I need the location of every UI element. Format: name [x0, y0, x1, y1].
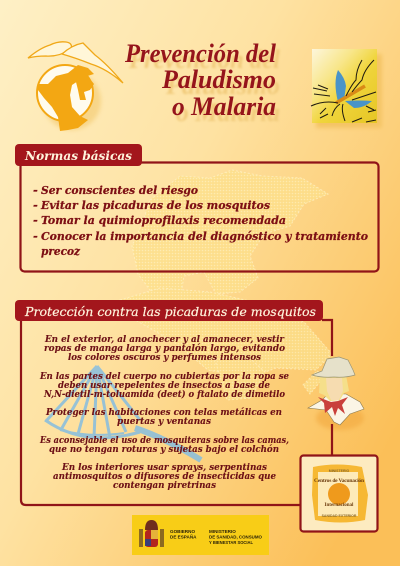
icon: traveller with hat — [308, 357, 364, 430]
title: Prevención del — [128, 45, 281, 74]
logo: globe and wheat — [28, 42, 123, 131]
panel: international vaccination centre badge: Internacional — [325, 503, 354, 508]
wheat ears — [28, 42, 123, 83]
panel frame — [21, 318, 332, 505]
badge text: MINISTERIO — [329, 469, 349, 473]
text: interiores: contengan piretrinas — [113, 480, 217, 491]
panel frame — [20, 162, 378, 272]
text: telas metálicas: puertas y ventanas — [117, 416, 212, 427]
list of basic rules: Tomar la quimioprofilaxis recomendada — [41, 213, 286, 227]
text: mosquiteras — [39, 435, 289, 455]
connector line — [331, 424, 333, 456]
heading: normas básicas: Normas básicas — [24, 148, 132, 163]
panel: protección — [15, 300, 332, 505]
list of basic rules: Evitar las picaduras de los mosquitos — [40, 198, 270, 212]
world map watermark — [120, 170, 332, 400]
text: exterior: En el exterior, al anochecer y al amanecer, vestir — [44, 334, 285, 345]
panel: international vaccination centre badge: Centros de Vacunación — [314, 478, 364, 484]
title: Paludismo — [161, 65, 276, 94]
text: interiores: En los interiores usar sprays, serpentinas — [61, 462, 268, 473]
government logo: DE SANIDAD, CONSUMO — [209, 534, 262, 540]
title — [124, 39, 281, 127]
heading: protección — [15, 300, 323, 321]
panel: normas básicas — [15, 144, 378, 272]
text: mosquiteras: que no tengan roturas y sujetas bajo el colchón — [49, 444, 279, 455]
text: repelentes: deben usar repelentes de insectos a base de — [58, 380, 270, 391]
icon: mosquito illustration — [311, 49, 382, 128]
panel: international vaccination centre badge — [300, 456, 378, 532]
list of basic rules: - — [33, 229, 38, 243]
list of basic rules: - — [33, 213, 38, 227]
text: exterior: los colores oscuros y perfumes intensos — [68, 352, 262, 363]
title: Prevención del — [124, 39, 277, 68]
globe — [37, 65, 93, 121]
title: o Malaria — [172, 92, 276, 121]
list of basic rules: Conocer la importancia del diagnóstico y tratamiento — [41, 229, 368, 243]
text: repelentes: N,N-dietil-m-toluamida (deet) o ftalato de dimetilo — [43, 389, 286, 400]
government logo — [132, 515, 269, 555]
list of basic rules — [33, 183, 368, 258]
government logo: DE ESPAÑA — [170, 534, 197, 540]
panel: international vaccination centre badge: SANIDAD EXTERIOR — [322, 514, 357, 518]
text: telas metálicas — [45, 407, 282, 427]
text: telas metálicas: Proteger las habitaciones con telas metálicas en — [45, 407, 282, 418]
government logo: MINISTERIO — [209, 529, 236, 534]
list of basic rules: - — [33, 183, 38, 197]
title: o Malaria — [176, 98, 280, 127]
blue mosquito watermark — [45, 366, 201, 460]
title: Paludismo — [165, 71, 280, 100]
text: repelentes: En las partes del cuerpo no cubiertas por la ropa se — [39, 371, 289, 382]
government logo: Y BIENESTAR SOCIAL — [209, 540, 253, 545]
text: mosquiteras: Es aconsejable el uso de mosquiteras sobre las camas, — [39, 435, 289, 446]
coat of arms — [139, 520, 164, 547]
list of basic rules: Ser conscientes del riesgo — [41, 183, 198, 197]
government text: GOBIERNO — [170, 529, 195, 534]
text: repelentes — [39, 371, 289, 400]
text: interiores: antimosquitos o difusores de insecticidas que — [53, 471, 276, 482]
text: exterior — [44, 334, 286, 363]
list of basic rules: - — [33, 198, 38, 212]
list of basic rules: precoz — [41, 244, 80, 258]
heading: protección: Protección contra las picaduras de mosquitos — [24, 304, 316, 319]
text: interiores — [53, 462, 276, 491]
heading: normas básicas — [15, 144, 142, 166]
text: exterior: ropas de manga larga y pantalón largo, evitando — [44, 343, 286, 354]
